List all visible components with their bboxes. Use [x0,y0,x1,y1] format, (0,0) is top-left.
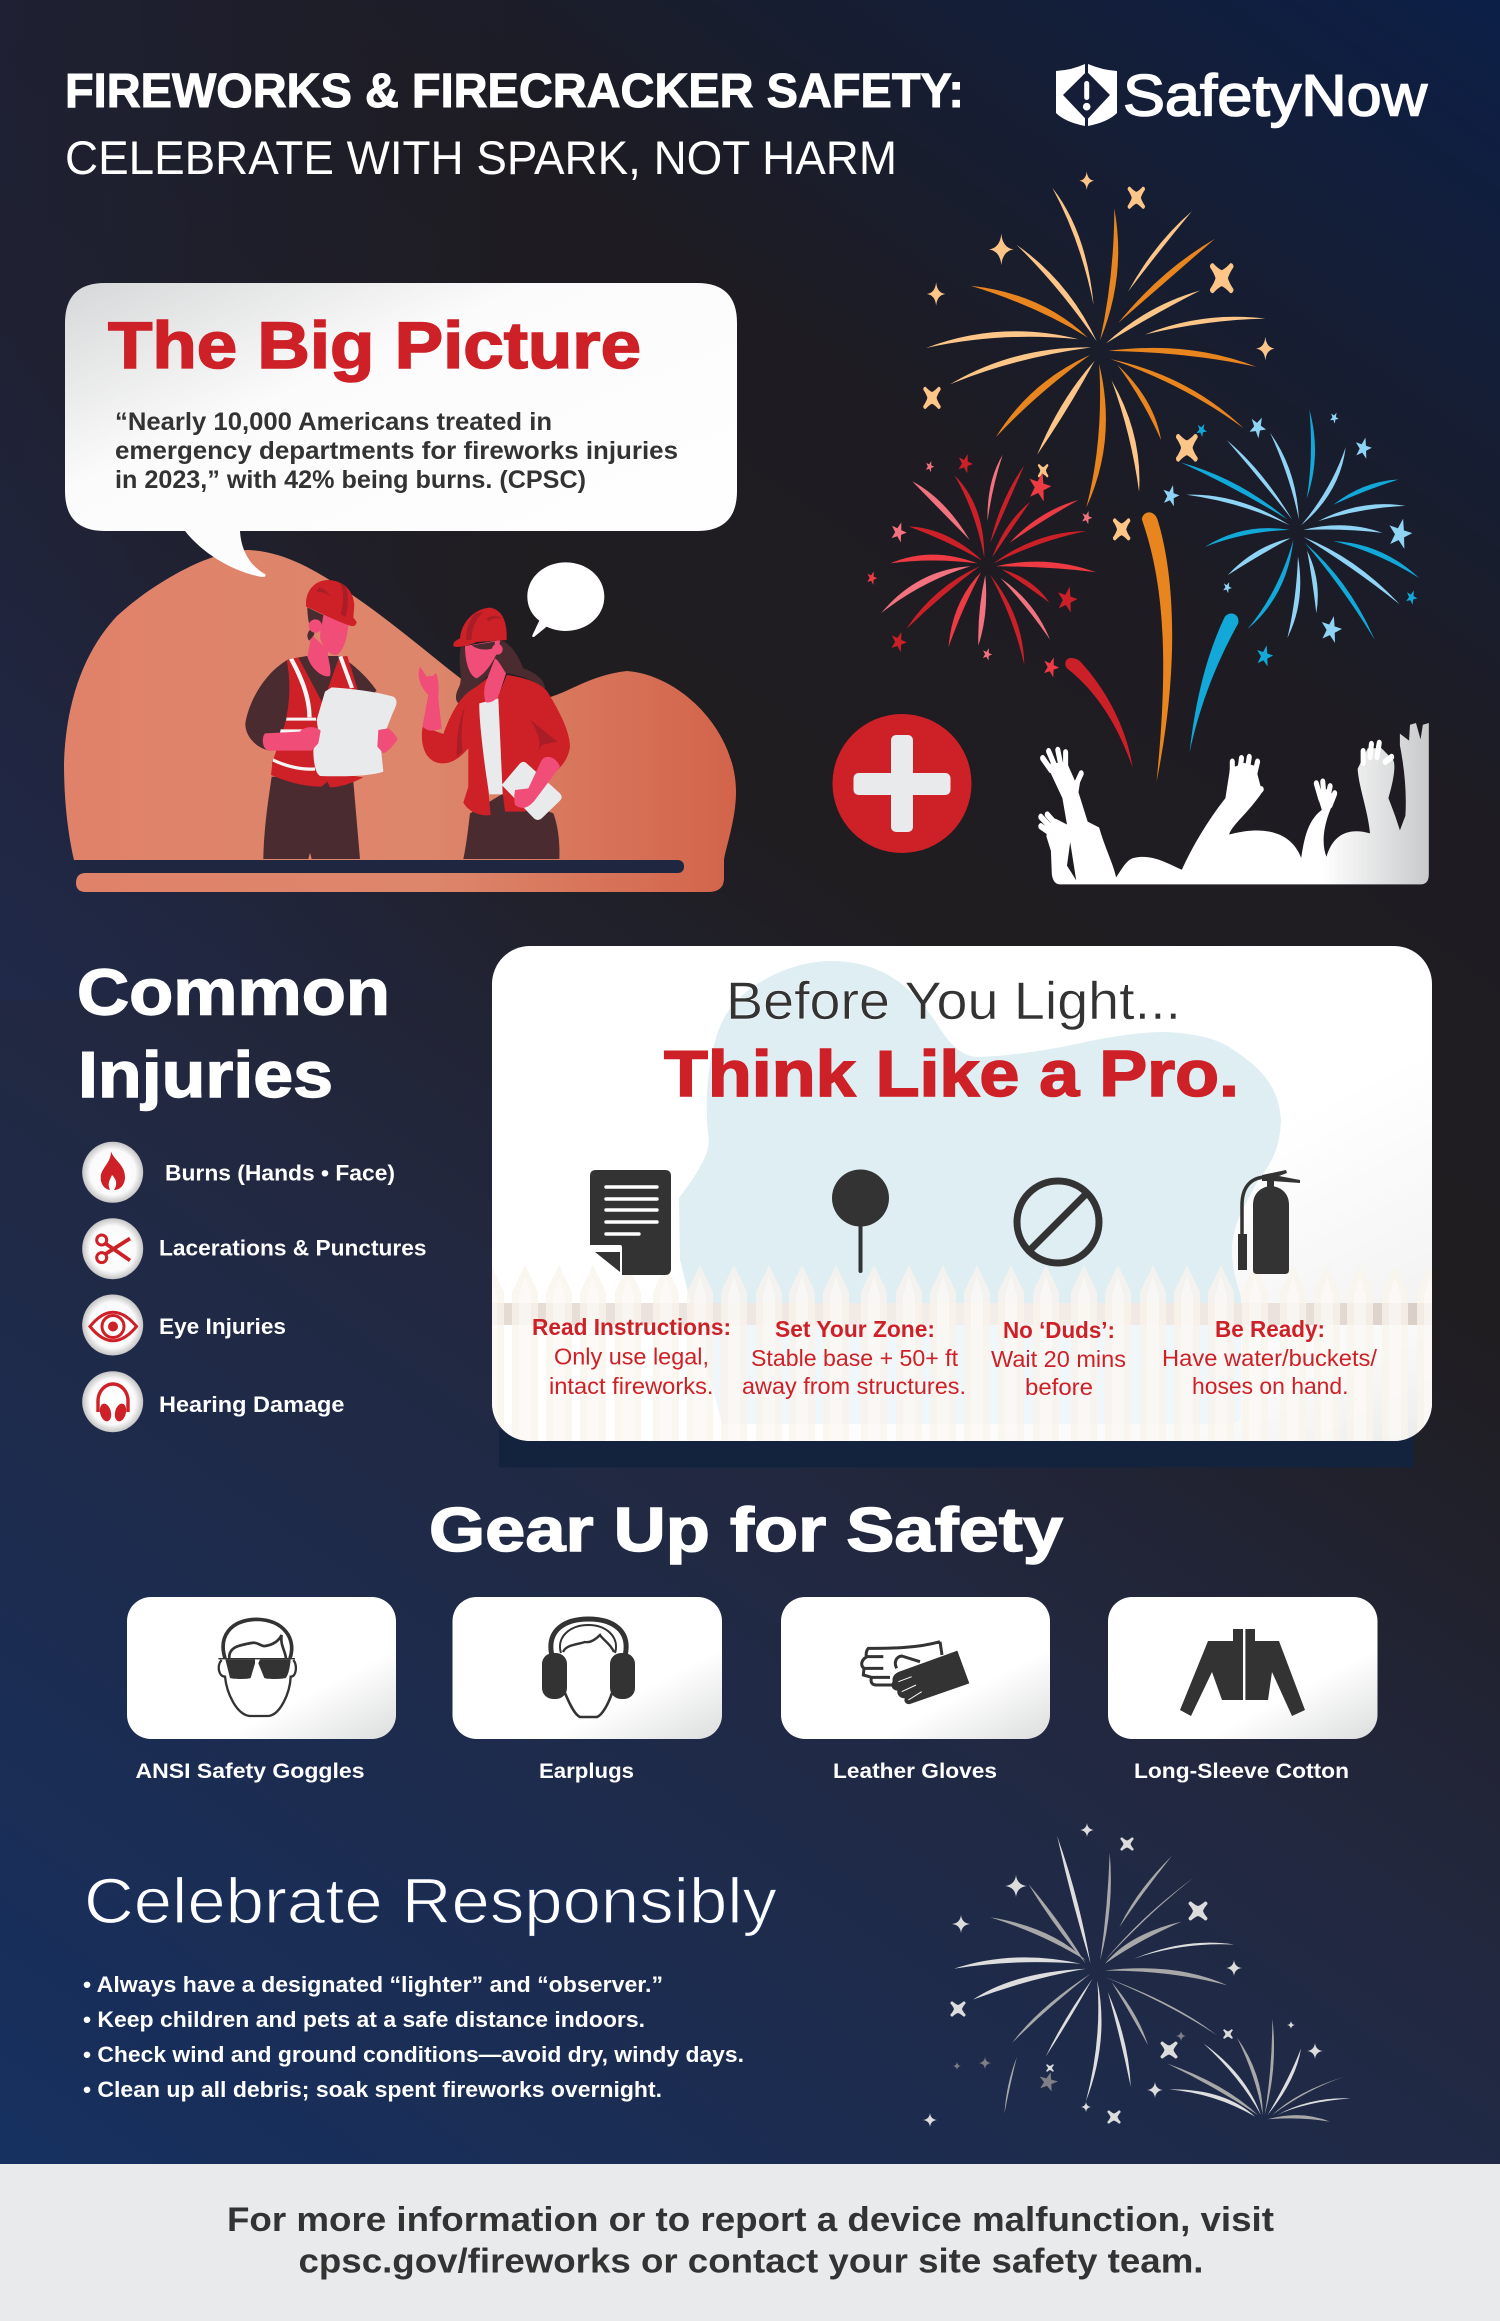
icon: face with goggles [218,1619,296,1716]
bullet list: • Always have a designated “lighter” and “observer.” [83,1972,663,1997]
raised fingers [1041,743,1392,833]
injury item: hearing [82,1371,344,1432]
injury item: burns [82,1142,395,1203]
icon: first aid cross [832,714,972,853]
step: no duds: Wait 20 mins [991,1346,1126,1372]
crowd silhouette [1041,723,1429,884]
step: read instructions [532,1314,731,1399]
injury item: hearing: Hearing Damage [159,1392,344,1417]
footer bar: cpsc.gov/fireworks or contact your site safety team. [298,2242,1204,2280]
light blue blob [679,961,1281,1424]
panel: the big picture speech bubble: The Big Picture [108,308,641,382]
gear card: gloves [781,1597,1050,1783]
lower veil [492,1325,1432,1441]
footer bar [0,2164,1500,2321]
blue firework burst [1161,410,1419,668]
step: be ready: Be Ready: [1215,1316,1325,1342]
icon: document [590,1170,671,1275]
icon: prohibition sign [1017,1181,1099,1263]
title [65,65,964,184]
step: set your zone [742,1316,966,1399]
gear card: earplugs [452,1597,722,1783]
bullet list: • Clean up all debris; soak spent fireworks overnight. [83,2077,662,2102]
orange firework burst [923,171,1275,540]
step: no duds: No ‘Duds’: [1003,1317,1115,1343]
step: no duds [991,1317,1126,1400]
logo: SafetyNow: SafetyNow [1123,64,1428,128]
gear card: goggles: ANSI Safety Goggles [136,1759,365,1783]
rising comets [1065,512,1238,782]
bullet list [83,1972,744,2102]
panel: before you light card [478,946,1443,1441]
step: set your zone: away from structures. [742,1373,966,1399]
step: set your zone: Set Your Zone: [775,1316,935,1342]
gear card: long sleeve: Long-Sleeve Cotton [1134,1759,1349,1783]
man in safety vest [245,580,398,859]
heading: gear up for safety: Gear Up for Safety [429,1496,1064,1565]
panel: the big picture speech bubble [65,283,737,577]
illustration: salmon hill background [64,550,736,892]
small speech bubble [527,562,604,637]
heading: celebrate responsibly: Celebrate Responsibly [84,1865,777,1937]
bullet list: • Keep children and pets at a safe distance indoors. [83,2007,645,2032]
panel: the big picture speech bubble: emergency departments for fireworks injuries [115,437,678,465]
icon: jacket [1180,1629,1305,1716]
picket fence [478,1265,1443,1441]
card shadow [499,1430,1414,1468]
step: set your zone: Stable base + 50+ ft [751,1345,958,1371]
injury item: eye [82,1294,286,1356]
injury item: lacerations: Lacerations & Punctures [159,1236,426,1260]
woman with tablet [419,608,570,859]
injury item: lacerations [82,1218,426,1279]
panel: the big picture speech bubble: in 2023,” with 42% being burns. (CPSC) [115,466,586,494]
injury item: eye: Eye Injuries [159,1314,286,1339]
silver firework [923,1823,1351,2127]
heading: Common Injuries: Common [77,956,390,1028]
heading: Common Injuries [77,956,390,1111]
title: CELEBRATE WITH SPARK, NOT HARM [65,131,897,184]
gear card: goggles [127,1597,396,1783]
step: read instructions: Read Instructions: [532,1314,731,1340]
gear card: long sleeve [1108,1597,1378,1783]
footer bar: For more information or to report a device malfunction, visit [227,2201,1274,2239]
title: FIREWORKS & FIRECRACKER SAFETY: [65,65,964,118]
injury item: burns: Burns (Hands • Face) [165,1160,395,1186]
heading: before you light: Before You Light... [726,972,1181,1031]
step: be ready [1162,1316,1377,1399]
red firework burst [865,451,1096,679]
step: read instructions: intact fireworks. [549,1373,714,1399]
heading: Common Injuries: Injuries [78,1038,333,1111]
illustration: two workers [245,562,604,859]
gear card: earplugs: Earplugs [539,1759,634,1783]
bullet list: • Check wind and ground conditions—avoid dry, windy days. [83,2042,744,2067]
dark ground line [74,860,684,873]
icon: ear protection [542,1619,635,1717]
step: be ready: Have water/buckets/ [1162,1345,1377,1371]
step: read instructions: Only use legal, [554,1344,709,1370]
icon: fire extinguisher [1238,1170,1300,1274]
step: be ready: hoses on hand. [1192,1373,1348,1399]
step: no duds: before [1025,1374,1093,1400]
heading: think like a pro: Think Like a Pro. [664,1037,1239,1110]
icon: location pin [832,1170,889,1273]
icon: leather gloves [862,1642,969,1704]
panel: the big picture speech bubble: “Nearly 10,000 Americans treated in [115,408,552,436]
gear card: gloves: Leather Gloves [833,1759,997,1783]
